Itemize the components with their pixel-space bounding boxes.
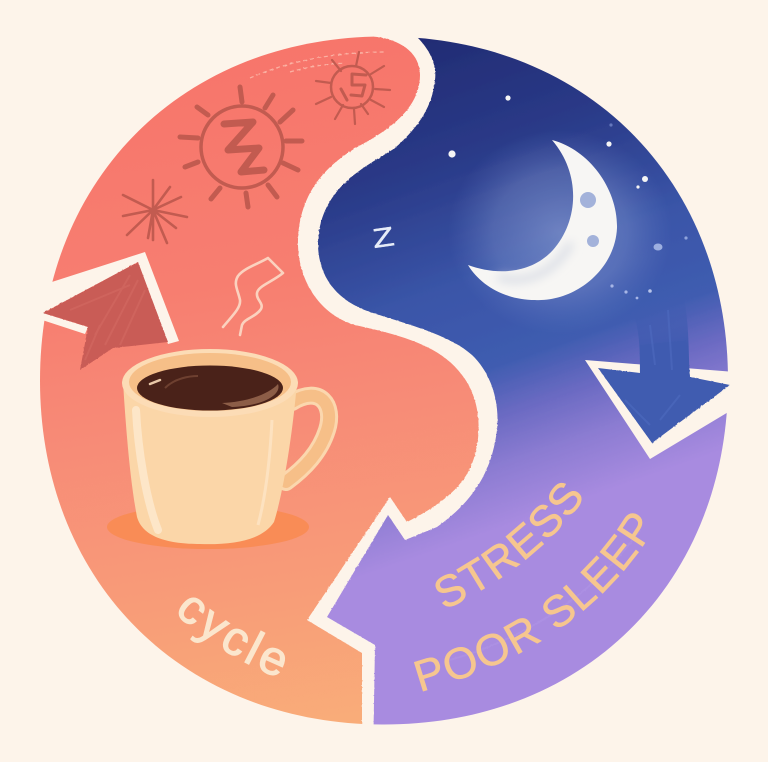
coffee [137, 366, 283, 410]
mug handle [286, 396, 329, 482]
panel: night and stress segment [318, 38, 728, 724]
moon craters [580, 192, 596, 208]
mug shadow [107, 505, 309, 549]
icon: steam [223, 258, 283, 335]
panel: coffee and fatigue segment [40, 36, 479, 724]
icon: crescent moon with glow [448, 130, 672, 334]
label: poor sleep: POOR SLEEP [414, 513, 646, 692]
icon: large sleepy sun [180, 87, 302, 207]
mug rim [122, 349, 298, 417]
icon: small sun [316, 52, 390, 124]
icon: coffee mug [107, 349, 329, 549]
label: sleeping z: Z [371, 221, 396, 254]
icon: zigzag on large sun [224, 122, 264, 172]
label: cycle: cycle [178, 598, 286, 676]
mug body [123, 382, 297, 544]
stars [448, 95, 688, 299]
icon: up arrow from coffee to fatigue [30, 252, 179, 370]
icon: down arrow from night to stress [585, 284, 735, 459]
icon: starburst [123, 180, 187, 243]
label: stress: STRESS [436, 482, 582, 607]
